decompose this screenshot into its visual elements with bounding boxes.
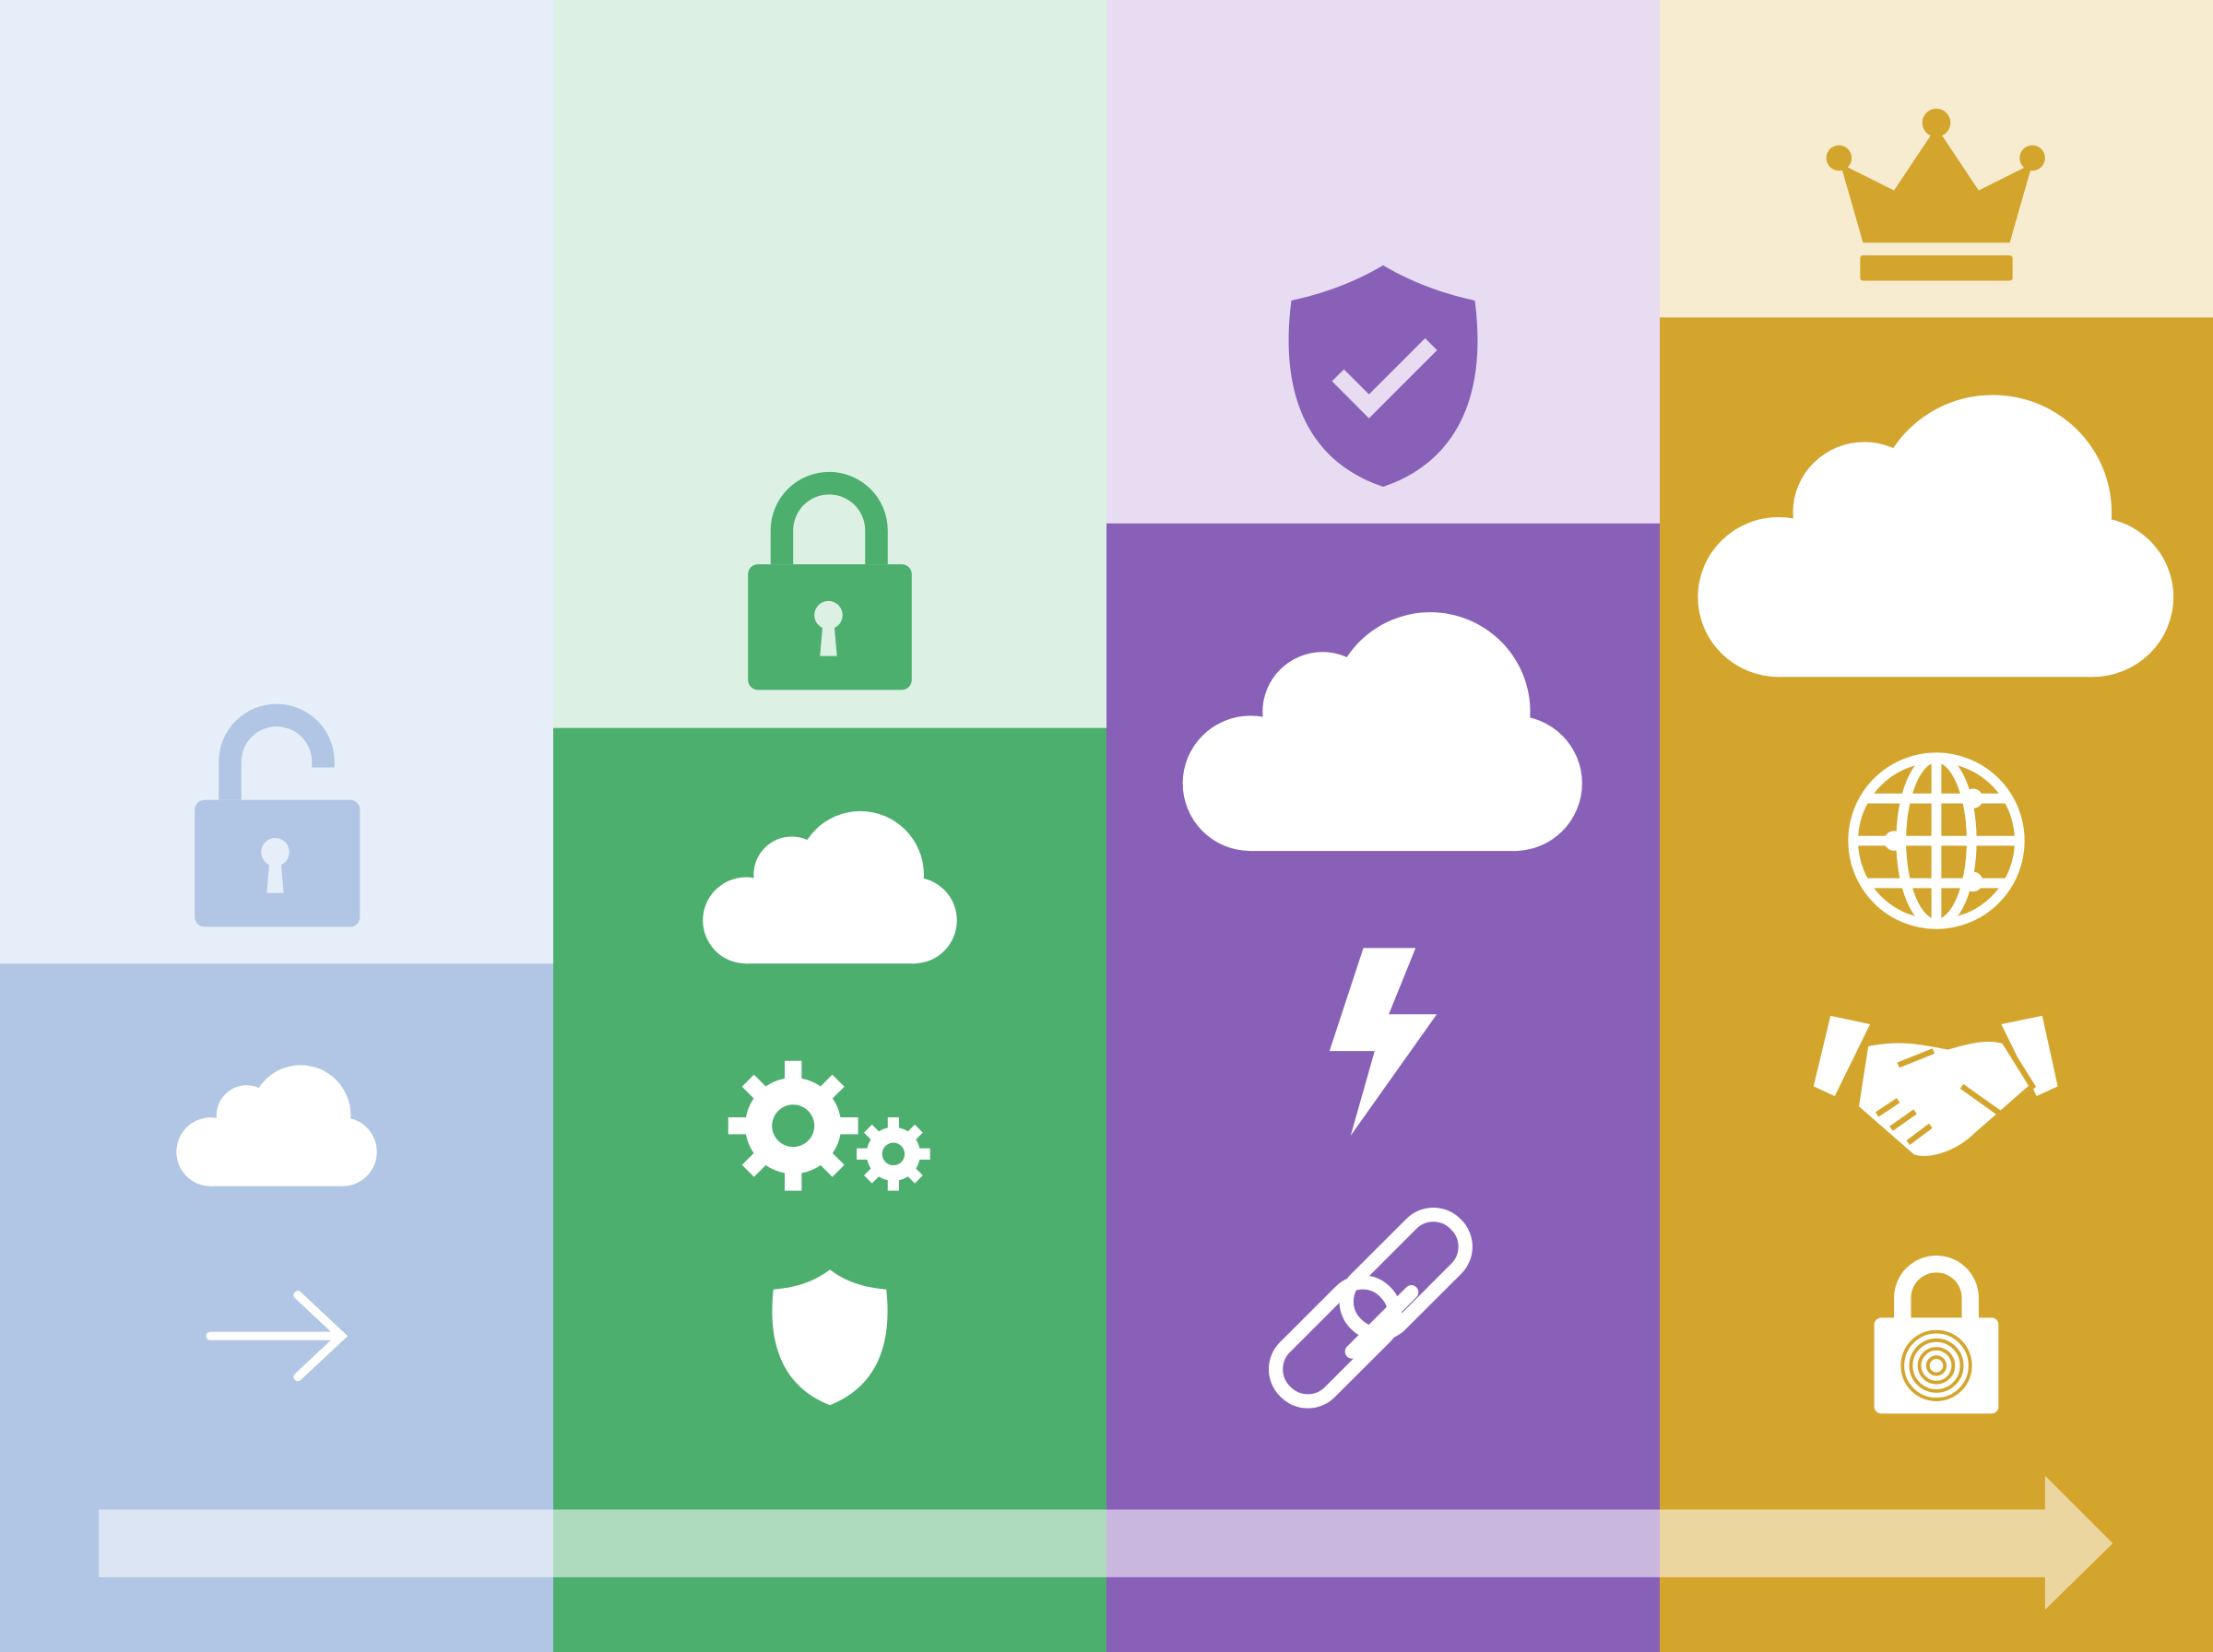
icon: large cloud stage 4 — [1698, 395, 2173, 677]
icon: fingerprint padlock — [1875, 1256, 1998, 1413]
icon: cloud stage 2 — [703, 811, 957, 963]
icon: shield stage 2 — [772, 1269, 888, 1405]
panel: stage 3 background — [1106, 0, 1662, 1652]
icon: chain link — [1263, 1202, 1478, 1414]
icon: globe — [1853, 758, 2019, 924]
icon: lightning — [1330, 948, 1437, 1136]
icon: shield with check — [1289, 266, 1477, 487]
panel: stage 1 background — [0, 0, 555, 1652]
icon: small cloud stage 1 — [176, 1065, 377, 1186]
panel: stage 2 background — [553, 0, 1108, 1652]
icon: open padlock — [195, 704, 360, 926]
panel: stage 4 background — [1660, 0, 2213, 1652]
icon: closed padlock green — [748, 472, 912, 690]
icon: crown — [1827, 109, 2045, 281]
icon: large cloud stage 3 — [1183, 612, 1582, 851]
icon: arrow right — [210, 1295, 341, 1377]
icon: handshake — [1814, 1016, 2058, 1159]
arrow: progression — [99, 1476, 2112, 1610]
icon: gears — [728, 1061, 930, 1191]
